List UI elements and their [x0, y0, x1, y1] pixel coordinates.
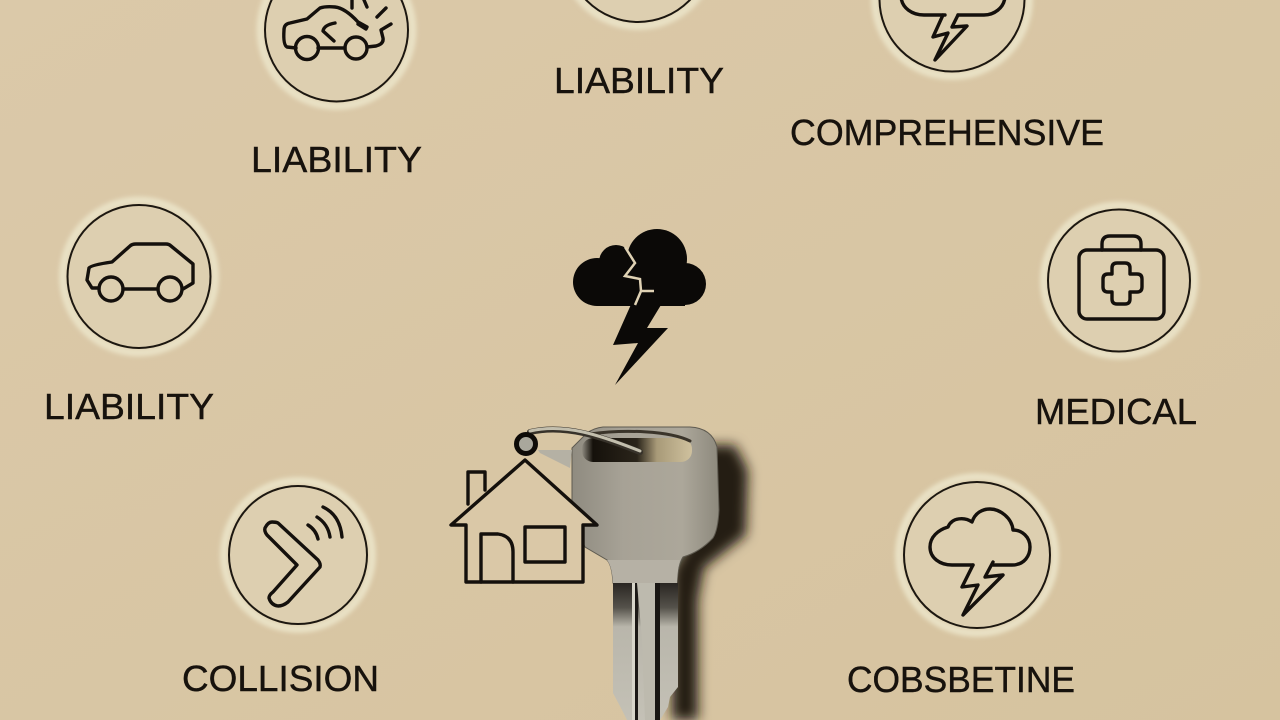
key blade	[613, 583, 678, 720]
icon: storm cloud outline	[901, 0, 1005, 60]
key ring	[530, 428, 690, 468]
badge: storm	[899, 477, 1055, 633]
icon: black storm cloud	[573, 229, 706, 385]
label: collision: COLLISION	[182, 658, 379, 699]
icon: house keychain	[451, 434, 597, 582]
key shoulder	[607, 560, 680, 583]
icon: crashed car	[284, 0, 391, 60]
badge: collision	[224, 481, 372, 629]
badge: comprehensive	[875, 0, 1029, 76]
icon: boomerang	[265, 507, 342, 606]
key shadow	[672, 445, 748, 720]
key slot	[582, 438, 692, 462]
icon: storm cloud	[930, 509, 1030, 615]
label: liability left top: LIABILITY	[251, 139, 422, 180]
label: cobsbetine: COBSBETINE	[847, 659, 1075, 700]
label: medical: MEDICAL	[1035, 391, 1197, 432]
icon: medical kit	[1079, 236, 1164, 319]
badge: crash	[260, 0, 412, 106]
key	[530, 427, 748, 720]
badge: medical	[1044, 206, 1194, 356]
key head	[572, 427, 719, 583]
badge: car	[63, 200, 215, 352]
label: liability left: LIABILITY	[44, 386, 214, 427]
keychain loop	[516, 434, 536, 454]
label: comprehensive: COMPREHENSIVE	[790, 112, 1104, 153]
label: liability top center: LIABILITY	[554, 60, 724, 101]
icon: car	[87, 244, 193, 301]
badge: top center	[562, 0, 714, 26]
